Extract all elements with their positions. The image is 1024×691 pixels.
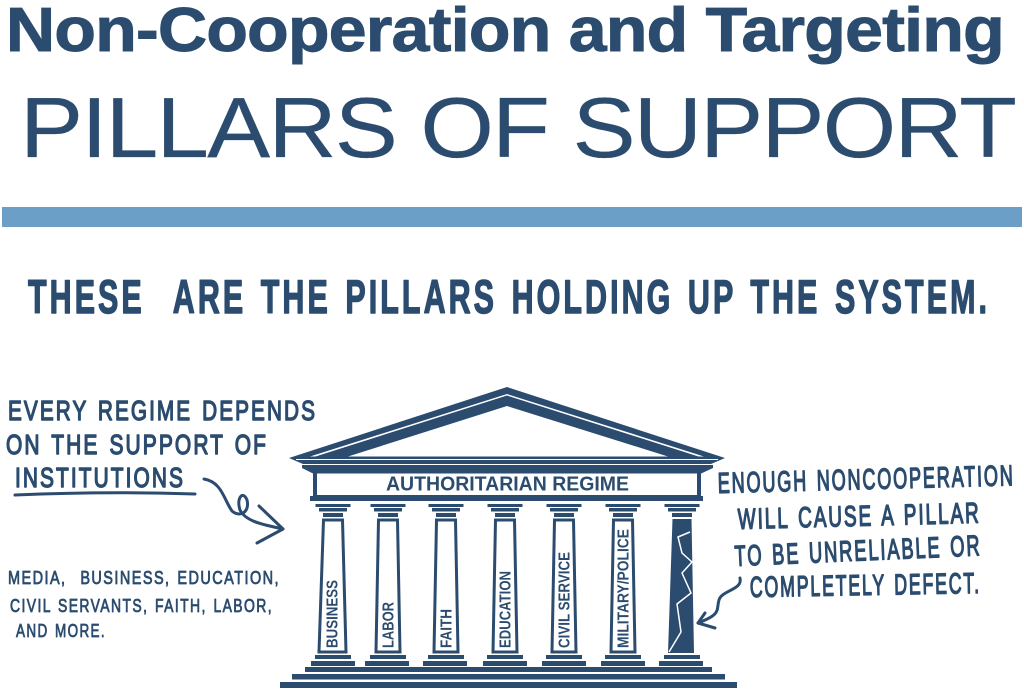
left callout: every regime depends: ON THE SUPPORT OF bbox=[6, 429, 268, 460]
entablature: Authoritarian Regime bbox=[310, 472, 703, 501]
pillar: Faith bbox=[423, 504, 467, 666]
left callout: every regime depends bbox=[6, 395, 317, 495]
pillar: Civil Service: CIVIL SERVICE bbox=[556, 552, 574, 648]
pillar: Faith: FAITH bbox=[438, 609, 456, 648]
pillar: Labor bbox=[365, 504, 409, 666]
pillar: Military/Police bbox=[601, 504, 645, 666]
left callout: every regime depends: EVERY REGIME DEPENDS bbox=[8, 395, 317, 426]
text: list of institutions: CIVIL SERVANTS, FAITH, LABOR, bbox=[10, 595, 273, 616]
pillar: Business bbox=[311, 504, 355, 666]
text: list of institutions bbox=[8, 567, 280, 641]
pillar: Education bbox=[483, 504, 527, 666]
text: list of institutions: AND MORE. bbox=[16, 620, 106, 641]
text: list of institutions: MEDIA, BUSINESS, EDUCATION, bbox=[8, 567, 280, 588]
right callout: enough noncooperation bbox=[717, 460, 1015, 604]
title: Pillars of Support: PILLARS OF SUPPORT bbox=[20, 81, 1015, 176]
arrow: institutions to temple bbox=[204, 479, 283, 543]
temple steps bbox=[280, 667, 737, 688]
pillar: cracked defecting pillar bbox=[659, 504, 703, 666]
pillar: Labor: LABOR bbox=[380, 602, 398, 648]
divider bar bbox=[2, 207, 1022, 227]
entablature: Authoritarian Regime: AUTHORITARIAN REGIME bbox=[386, 474, 629, 496]
pillar: Civil Service bbox=[542, 504, 586, 666]
pillar: Business: BUSINESS bbox=[324, 580, 342, 648]
temple illustration bbox=[280, 387, 737, 688]
pillar: Military/Police: MILITARY/POLICE bbox=[616, 529, 632, 648]
temple roof bbox=[289, 387, 725, 474]
arrow: callout to cracked pillar bbox=[698, 578, 740, 628]
left callout: every regime depends: INSTITUTIONS bbox=[15, 462, 185, 493]
pillar: Education: EDUCATION bbox=[498, 571, 514, 648]
